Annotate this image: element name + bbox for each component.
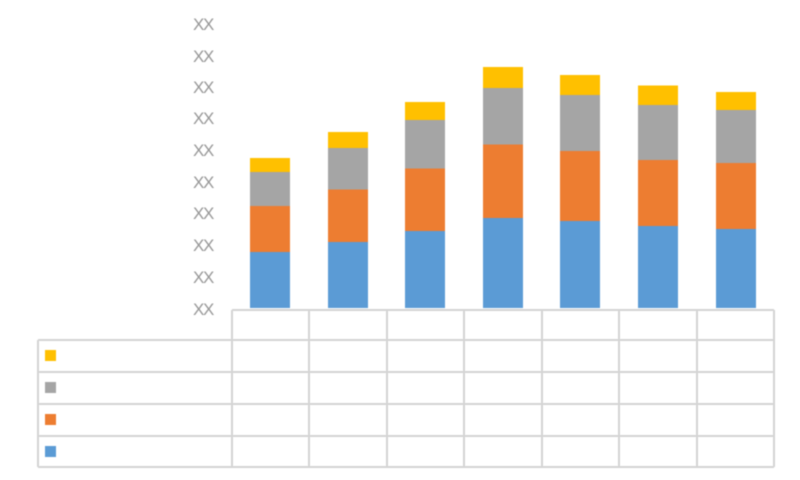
y axis labels: XX — [193, 109, 214, 128]
column 1 — [250, 158, 290, 308]
legend key: yellow series — [45, 350, 56, 361]
y axis labels: XX — [193, 173, 214, 192]
column 3 — [405, 102, 445, 308]
data table grid — [38, 310, 774, 467]
legend key: blue series — [45, 446, 56, 457]
y axis labels: XX — [193, 15, 214, 34]
y axis labels: XX — [193, 204, 214, 223]
y axis labels: XX — [193, 300, 214, 319]
column 6 — [638, 86, 678, 308]
y axis labels: XX — [193, 268, 214, 287]
column 5 — [560, 75, 600, 308]
y axis labels: XX — [193, 78, 214, 97]
y axis labels: XX — [193, 47, 214, 66]
legend key: gray series — [45, 382, 56, 393]
column 7 — [716, 92, 756, 308]
legend key: orange series — [45, 414, 56, 425]
y axis labels — [193, 15, 214, 319]
y axis labels: XX — [193, 236, 214, 255]
y axis labels: XX — [193, 141, 214, 160]
column 2 — [328, 132, 368, 308]
column 4 — [483, 67, 523, 308]
